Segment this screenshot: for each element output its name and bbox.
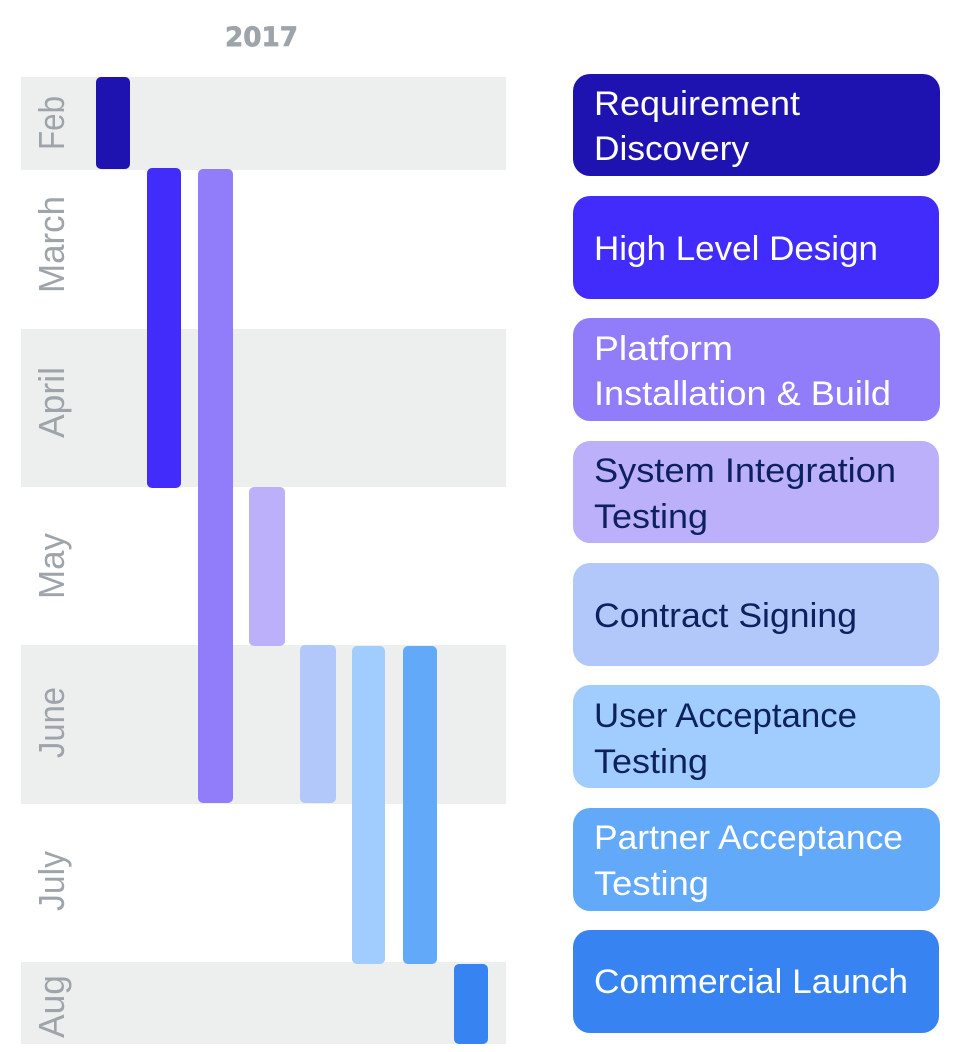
card: High Level Design: High Level Design bbox=[594, 230, 878, 268]
month labels bbox=[31, 96, 72, 1038]
card: Requirement Discovery: Requirement bbox=[594, 85, 801, 123]
card: Partner Acceptance Testing bbox=[573, 808, 940, 911]
month bands bbox=[21, 77, 506, 1044]
bar: Platform Installation and Build bbox=[198, 169, 233, 803]
gantt chart bars bbox=[96, 77, 488, 1044]
bar: Partner Acceptance Testing bbox=[403, 646, 437, 964]
card: Partner Acceptance Testing: Partner Acceptance bbox=[594, 819, 903, 857]
label: Feb: Feb bbox=[31, 96, 72, 150]
card: Platform Installation and Build bbox=[573, 318, 940, 421]
card: User Acceptance Testing: User Acceptance bbox=[594, 697, 857, 735]
label: March: March bbox=[31, 196, 72, 293]
card: Commercial Launch: Commercial Launch bbox=[594, 963, 908, 1001]
label: July: July bbox=[31, 851, 72, 911]
card: System Integration Testing: System Integration bbox=[594, 452, 896, 490]
card: Requirement Discovery: Discovery bbox=[594, 130, 749, 168]
bar: High Level Design bbox=[147, 168, 181, 488]
card: Platform Installation and Build: Platform bbox=[594, 330, 733, 368]
card: High Level Design bbox=[573, 196, 939, 299]
card: Requirement Discovery bbox=[573, 74, 940, 176]
legend cards bbox=[573, 74, 940, 1033]
card: System Integration Testing: Testing bbox=[594, 498, 708, 536]
bar: System Integration Testing bbox=[249, 487, 285, 646]
card: Platform Installation and Build: Installation & Build bbox=[594, 375, 891, 413]
bar: Commercial Launch bbox=[454, 964, 488, 1044]
card: Partner Acceptance Testing: Testing bbox=[594, 865, 709, 903]
title: year: 2017 bbox=[225, 22, 298, 53]
bar: Requirement Discovery bbox=[96, 77, 130, 169]
card: User Acceptance Testing: Testing bbox=[594, 743, 708, 781]
label: May: May bbox=[31, 533, 72, 599]
card: Commercial Launch bbox=[573, 930, 939, 1033]
label: June: June bbox=[31, 687, 72, 758]
card: Contract Signing bbox=[573, 563, 939, 666]
bar: User Acceptance Testing bbox=[352, 646, 385, 964]
card: Contract Signing: Contract Signing bbox=[594, 597, 857, 635]
label: Aug: Aug bbox=[31, 975, 72, 1038]
bar: Contract Signing bbox=[300, 645, 336, 803]
card: System Integration Testing bbox=[573, 441, 939, 543]
label: April: April bbox=[31, 367, 72, 438]
card: User Acceptance Testing bbox=[573, 685, 940, 788]
